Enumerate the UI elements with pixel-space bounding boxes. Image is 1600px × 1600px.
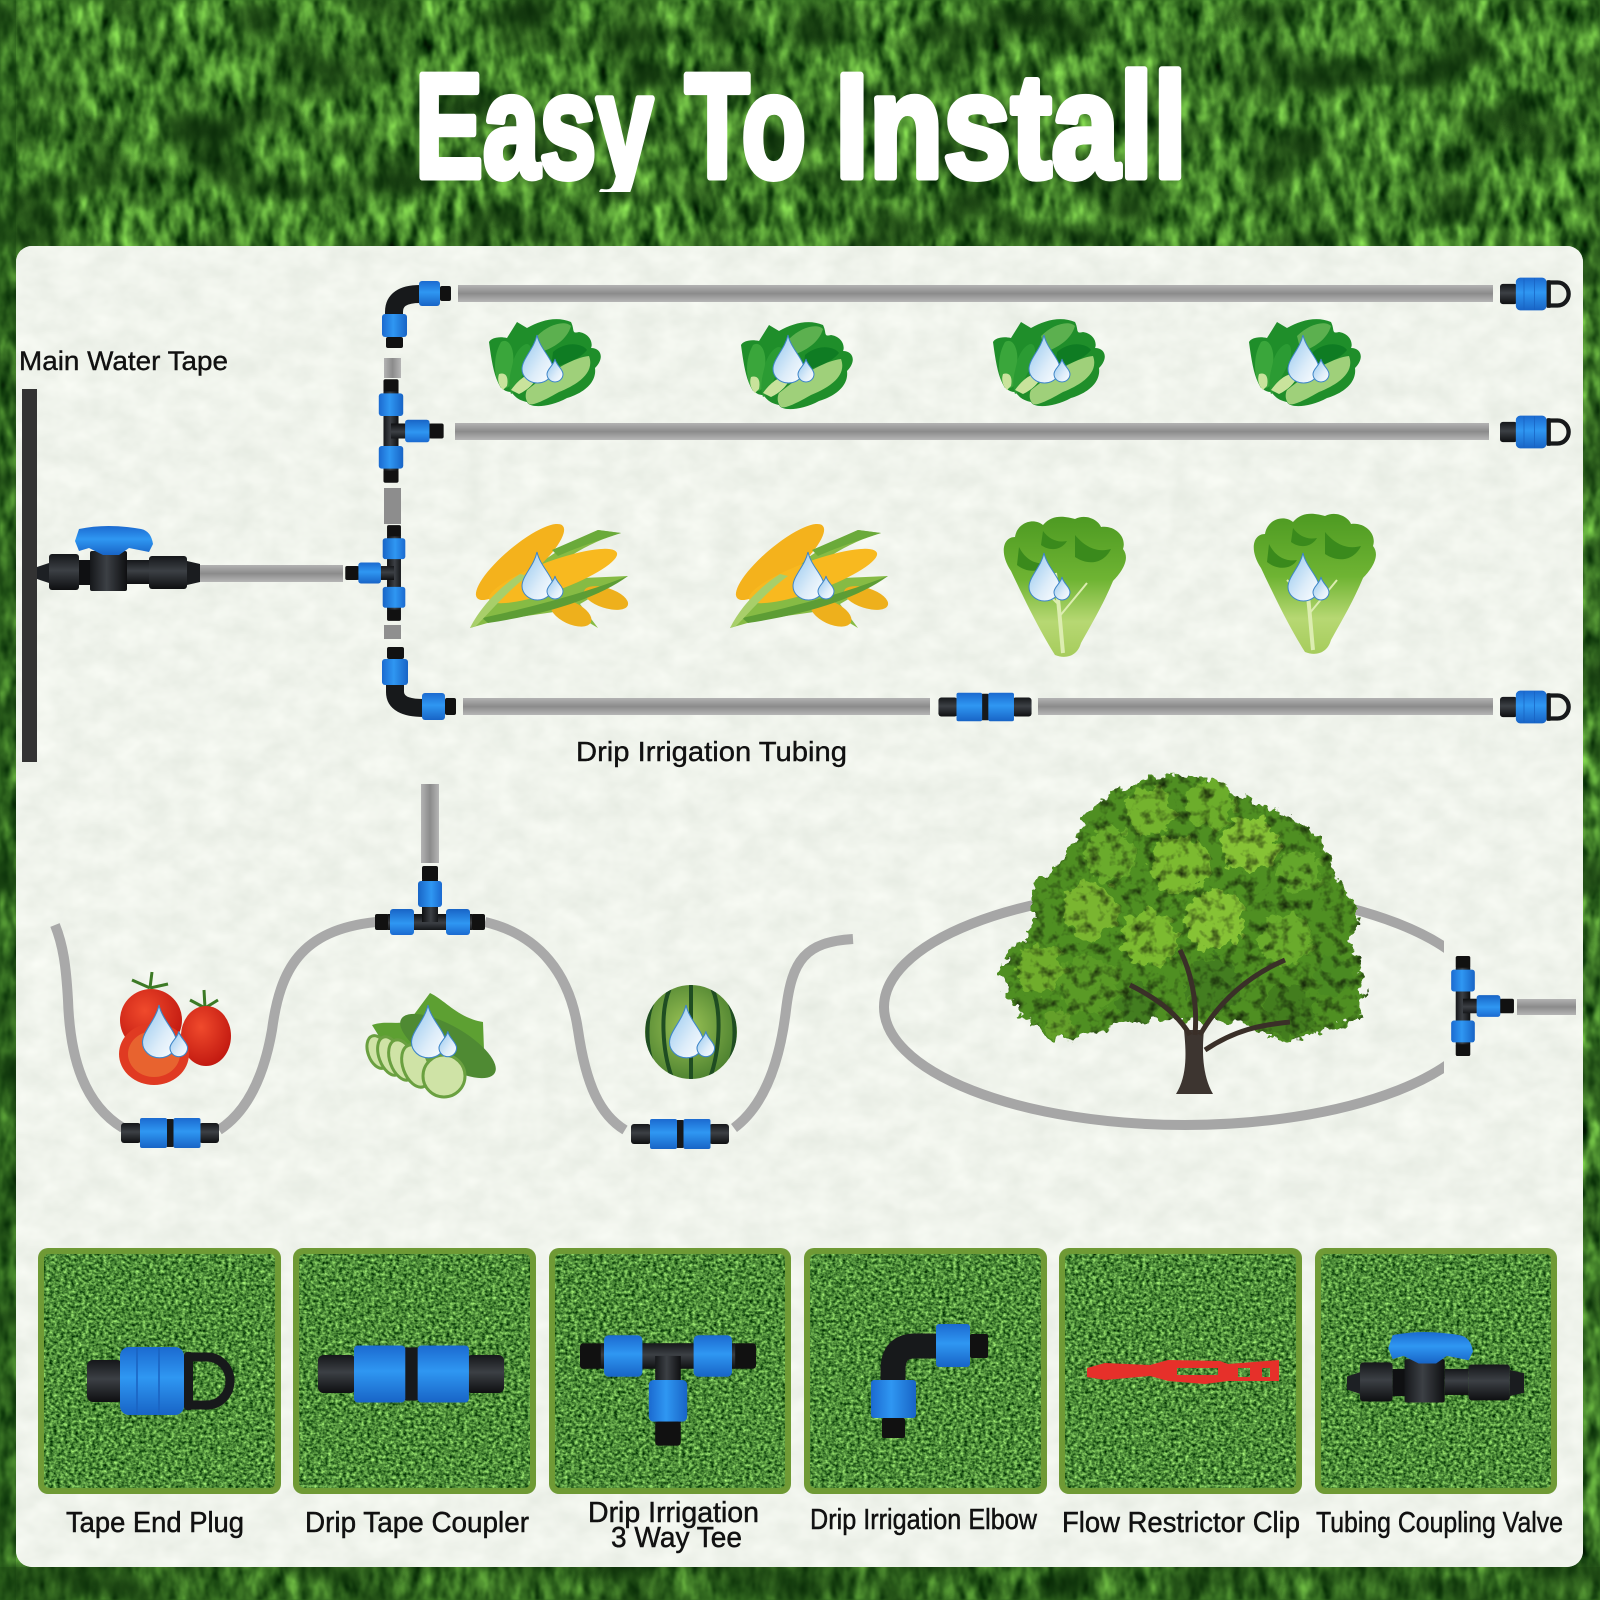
panel: coupling valve xyxy=(1315,1248,1557,1494)
title xyxy=(419,66,1182,192)
header tube segments xyxy=(384,358,401,639)
bottom elbow xyxy=(382,647,456,720)
label: drip irrigation 3 way tee: 3 Way Tee xyxy=(611,1522,742,1554)
panel: tape end plug xyxy=(38,1248,281,1494)
crops: lettuce xyxy=(1004,514,1376,657)
feeder tube xyxy=(200,565,343,582)
label: drip irrigation tubing: Drip Irrigation Tubing xyxy=(576,736,847,767)
right tee and tube xyxy=(1451,956,1576,1056)
valve on main line xyxy=(37,526,200,591)
drip tubes xyxy=(455,285,1493,715)
panel: 3 way tee xyxy=(549,1248,791,1494)
label: tape end plug: Tape End Plug xyxy=(66,1507,244,1539)
wavy bed tubing xyxy=(55,922,853,1130)
second row tee xyxy=(379,379,444,483)
crop: cucumbers xyxy=(363,993,505,1097)
crop: tomatoes xyxy=(119,972,231,1085)
crops: bok choy row xyxy=(489,319,1361,409)
label: drip irrigation 3 way tee: Drip Irrigation xyxy=(588,1497,759,1529)
crops: corn xyxy=(467,514,891,632)
panel: elbow xyxy=(804,1248,1047,1494)
panel: drip tape coupler xyxy=(293,1248,536,1494)
main header tee xyxy=(345,525,405,621)
coupler on bottom tube xyxy=(938,693,1032,721)
bed couplers xyxy=(121,1118,729,1149)
oval tubing around tree xyxy=(884,889,1486,1125)
main water tape bar xyxy=(22,389,37,762)
crop: watermelon xyxy=(645,985,737,1080)
top elbow xyxy=(382,281,451,348)
label: drip tape coupler: Drip Tape Coupler xyxy=(305,1507,529,1539)
label: main water tape: Main Water Tape xyxy=(19,346,228,376)
title: To xyxy=(685,44,806,209)
label: drip irrigation 3 way tee xyxy=(588,1497,759,1554)
panel: flow restrictor clip xyxy=(1059,1248,1302,1494)
tree xyxy=(1002,775,1363,1094)
end plugs xyxy=(1500,278,1569,723)
title: Easy xyxy=(415,44,653,209)
label: tubing coupling valve: Tubing Coupling Valve xyxy=(1316,1507,1563,1539)
bed tee xyxy=(375,866,485,935)
label: drip irrigation elbow: Drip Irrigation Elbow xyxy=(810,1504,1038,1536)
label: flow restrictor clip: Flow Restrictor Clip xyxy=(1062,1507,1300,1539)
riser tube xyxy=(421,784,439,863)
title: Install xyxy=(835,44,1187,209)
